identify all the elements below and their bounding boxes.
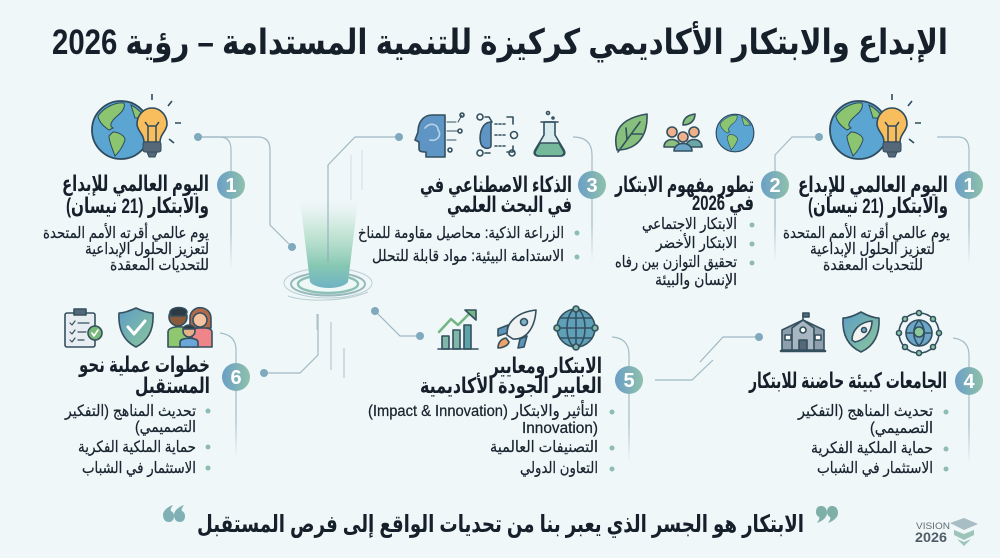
icon: leaf: [616, 114, 647, 152]
heading: العايير الجودة الأكاديمية: [420, 371, 602, 398]
body text: يوم عالمي أقرته الأمم المتحدة: [783, 222, 950, 243]
number badge 1: [217, 171, 245, 199]
icon: rocket: [498, 310, 536, 348]
number badge 6: 6: [230, 367, 242, 389]
bullets: التصميمي): [870, 420, 933, 438]
heading: اليوم العالمي للإبداع: [62, 172, 209, 196]
number badge 3: 3: [586, 175, 598, 197]
number badge 4: [955, 367, 983, 395]
heading: في 2026: [692, 191, 754, 215]
number badge 1: 1: [963, 175, 975, 197]
icon: shield rocket: [843, 312, 879, 352]
heading: والابتكار (21 نيسان): [66, 194, 209, 218]
icon: flask: [534, 112, 565, 156]
heading: [614, 173, 754, 215]
bullets: التأثير والابتكار (Impact & Innovation): [368, 400, 598, 421]
icon: people and leaf: [664, 114, 702, 151]
bullets: حماية الملكية الفكرية: [78, 439, 196, 456]
heading: الابتكار ومعايير: [489, 354, 602, 378]
panel: world day, right: [783, 94, 983, 274]
panel: quality standards: [368, 306, 643, 478]
icon: globe: [716, 114, 754, 152]
number badge 4: 4: [963, 371, 975, 393]
body text: يوم عالمي أقرته الأمم المتحدة: [43, 222, 209, 243]
heading: [62, 172, 209, 218]
body text: [43, 222, 209, 274]
Vision 2026 logo: VISION: [916, 521, 950, 532]
bullets: الإنسان والبيئة: [655, 272, 737, 290]
Vision 2026 logo: [915, 518, 978, 546]
bullets: (Innovation: [522, 420, 598, 437]
heading: المستقبل: [135, 374, 210, 398]
bullets: [797, 403, 948, 478]
bullets: الزراعة الذكية: محاصيل مقاومة للمناخ: [358, 225, 564, 243]
heading: الذكاء الاصطناعي في: [420, 173, 572, 197]
body text: لتعزيز الحلول الإبداعية: [85, 241, 209, 258]
icon: globe and bulb: [830, 94, 921, 159]
bullets: الاستثمار في الشباب: [817, 460, 933, 478]
bullets: تحديث المناهج (التفكير: [64, 403, 196, 420]
bullets: الابتكار الأخضر: [655, 233, 737, 252]
bullets: الاستثمار في الشباب: [82, 460, 196, 478]
number badge 2: 2: [769, 175, 781, 197]
heading: [798, 173, 948, 218]
bullets: الاستدامة البيئية: مواد قابلة للتحلل: [372, 248, 564, 265]
quote banner: [163, 505, 838, 538]
quotation mark, left: [163, 505, 185, 522]
body text: للتحديات المعقدة: [823, 257, 923, 274]
body text: للتحديات المعقدة: [110, 257, 209, 274]
icon: family: [168, 308, 212, 347]
icon: clipboard: [65, 309, 102, 347]
bullets: تحديث المناهج (التفكير: [797, 403, 933, 420]
heading: في البحث العلمي: [447, 193, 572, 217]
bullets: التصميمي): [135, 419, 196, 437]
number badge 3: [578, 171, 606, 199]
central beam hub: [284, 165, 372, 300]
body text: [783, 222, 950, 274]
icon: growth chart: [438, 310, 478, 349]
icon: shield check: [119, 308, 153, 347]
icon: globe and bulb: [92, 94, 181, 159]
number badge 1: [955, 171, 983, 199]
heading: تطور مفهوم الابتكار: [614, 173, 754, 197]
body text: لتعزيز الحلول الإبداعية: [810, 241, 935, 258]
bullets: حماية الملكية الفكرية: [811, 440, 933, 457]
icon: brain circuit: [477, 114, 518, 156]
icon: network globe: [896, 310, 942, 356]
panel: innovation concept: [614, 114, 789, 290]
heading: [420, 354, 602, 398]
number badge 1: 1: [225, 175, 237, 197]
connector lines: [198, 137, 969, 464]
bullets: [615, 216, 754, 290]
bullets: التعاون الدولي: [520, 460, 598, 478]
panel: universities: [748, 310, 983, 478]
bullets: الابتكار الاجتماعي: [642, 216, 737, 234]
icon: network globe: [554, 306, 598, 350]
heading: [78, 353, 210, 398]
panel: practical steps: [64, 308, 250, 478]
icon: school: [781, 313, 825, 351]
quotation mark, right: [816, 506, 838, 523]
heading: خطوات عملية نحو: [78, 353, 210, 377]
number badge 5: 5: [623, 370, 635, 392]
number badge 5: [615, 366, 643, 394]
number badge 2: [761, 171, 789, 199]
icon: AI head: [415, 113, 464, 157]
bullets: [368, 400, 614, 478]
bullets: تحقيق التوازن بين رفاه: [615, 254, 737, 271]
quote text: الابتكار هو الجسر الذي يعبر بنا من تحديات الواقع إلى فرص المستقبل: [197, 511, 804, 538]
number badge 6: [222, 363, 250, 391]
bullets: [64, 403, 210, 478]
bullets: [358, 225, 580, 265]
panel: world day, left: [43, 94, 245, 274]
Vision 2026 logo: 2026: [915, 529, 947, 545]
panel: AI in research: [358, 112, 606, 265]
heading: [420, 173, 572, 217]
connector dots: [194, 133, 823, 377]
bullets: التصنيفات العالمية: [490, 439, 598, 456]
heading: والابتكار (21 نيسان): [808, 194, 948, 218]
